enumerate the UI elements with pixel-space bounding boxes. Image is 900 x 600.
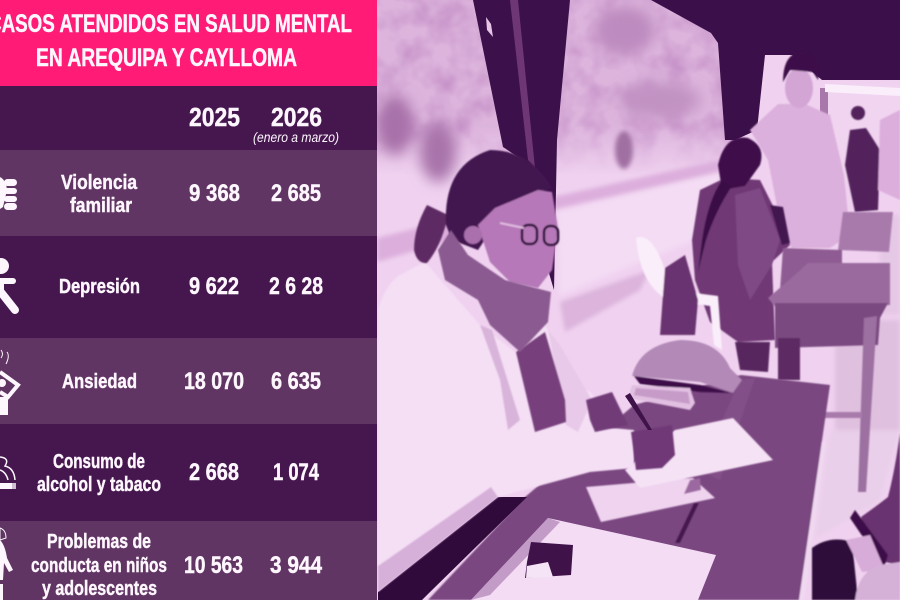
documents and stamp	[471, 518, 716, 600]
column headings: (enero a marzo)	[253, 129, 339, 145]
woman's fleece jacket	[378, 262, 634, 592]
column headings: 2025	[189, 102, 240, 132]
row: problemas de conducta: 10 563	[184, 552, 243, 579]
row: ansiedad	[0, 350, 321, 415]
plastic chair and bag	[636, 237, 722, 350]
background person	[845, 106, 900, 212]
column headings: 2026	[271, 102, 322, 132]
row: ansiedad: 6 635	[271, 368, 321, 395]
title banner: CASOS ATENDIDOS EN SALUD MENTAL	[0, 10, 352, 38]
row: violencia familiar: familiar	[70, 195, 132, 217]
blurred trees background	[377, 0, 737, 182]
road and ground	[377, 85, 900, 540]
icon: slumped figure	[0, 258, 15, 310]
forms being filled in	[586, 418, 773, 522]
row: problemas de conducta	[0, 528, 323, 600]
row: depresion: 9 622	[189, 273, 239, 300]
row: problemas de conducta: conducta en niños	[31, 555, 167, 577]
row: consumo de alcohol y tabaco: Consumo de	[53, 451, 145, 473]
icon: cigarette and smoke	[0, 457, 15, 489]
row: consumo de alcohol y tabaco: alcohol y tabaco	[37, 474, 161, 496]
woman's hair and face	[414, 150, 558, 288]
seated client at right corner	[812, 433, 900, 600]
standing man	[750, 52, 850, 248]
row: depresion: 2 6 28	[269, 273, 323, 300]
row: ansiedad: Ansiedad	[62, 371, 137, 393]
rear table	[768, 212, 893, 492]
row: violencia familiar: Violencia	[61, 172, 138, 194]
panel: data table	[0, 0, 377, 600]
row: problemas de conducta: y adolescentes	[42, 578, 157, 600]
row: consumo de alcohol y tabaco	[0, 451, 319, 496]
row: problemas de conducta: 3 944	[270, 552, 323, 579]
seated woman with braid	[692, 138, 790, 372]
row: consumo de alcohol y tabaco: 2 668	[189, 459, 239, 486]
title banner	[0, 0, 377, 86]
tent pole left	[473, 0, 570, 290]
row: consumo de alcohol y tabaco: 1 074	[273, 459, 319, 486]
photo: health worker at a table	[377, 0, 900, 600]
row: ansiedad: 18 070	[184, 368, 244, 395]
table	[428, 375, 830, 600]
row: violencia familiar: 9 368	[189, 180, 240, 207]
dark space under arm	[378, 497, 527, 600]
title banner: EN AREQUIPA Y CAYLLOMA	[36, 44, 297, 72]
pen	[625, 393, 652, 430]
icon: person holding head	[0, 350, 18, 415]
row: problemas de conducta: Problemas de	[47, 531, 151, 553]
row: violencia familiar: 2 685	[271, 180, 321, 207]
icon: fist	[0, 177, 17, 210]
row: depresion: Depresión	[59, 276, 140, 298]
column headings	[189, 102, 339, 145]
pencil case and phone	[628, 340, 742, 410]
row: depresion	[0, 258, 323, 310]
scarf	[438, 230, 551, 352]
tent canopy right	[651, 0, 900, 140]
row: violencia familiar	[0, 172, 321, 217]
icon: child figure	[0, 528, 13, 600]
woman's shirt and hands	[516, 332, 675, 470]
